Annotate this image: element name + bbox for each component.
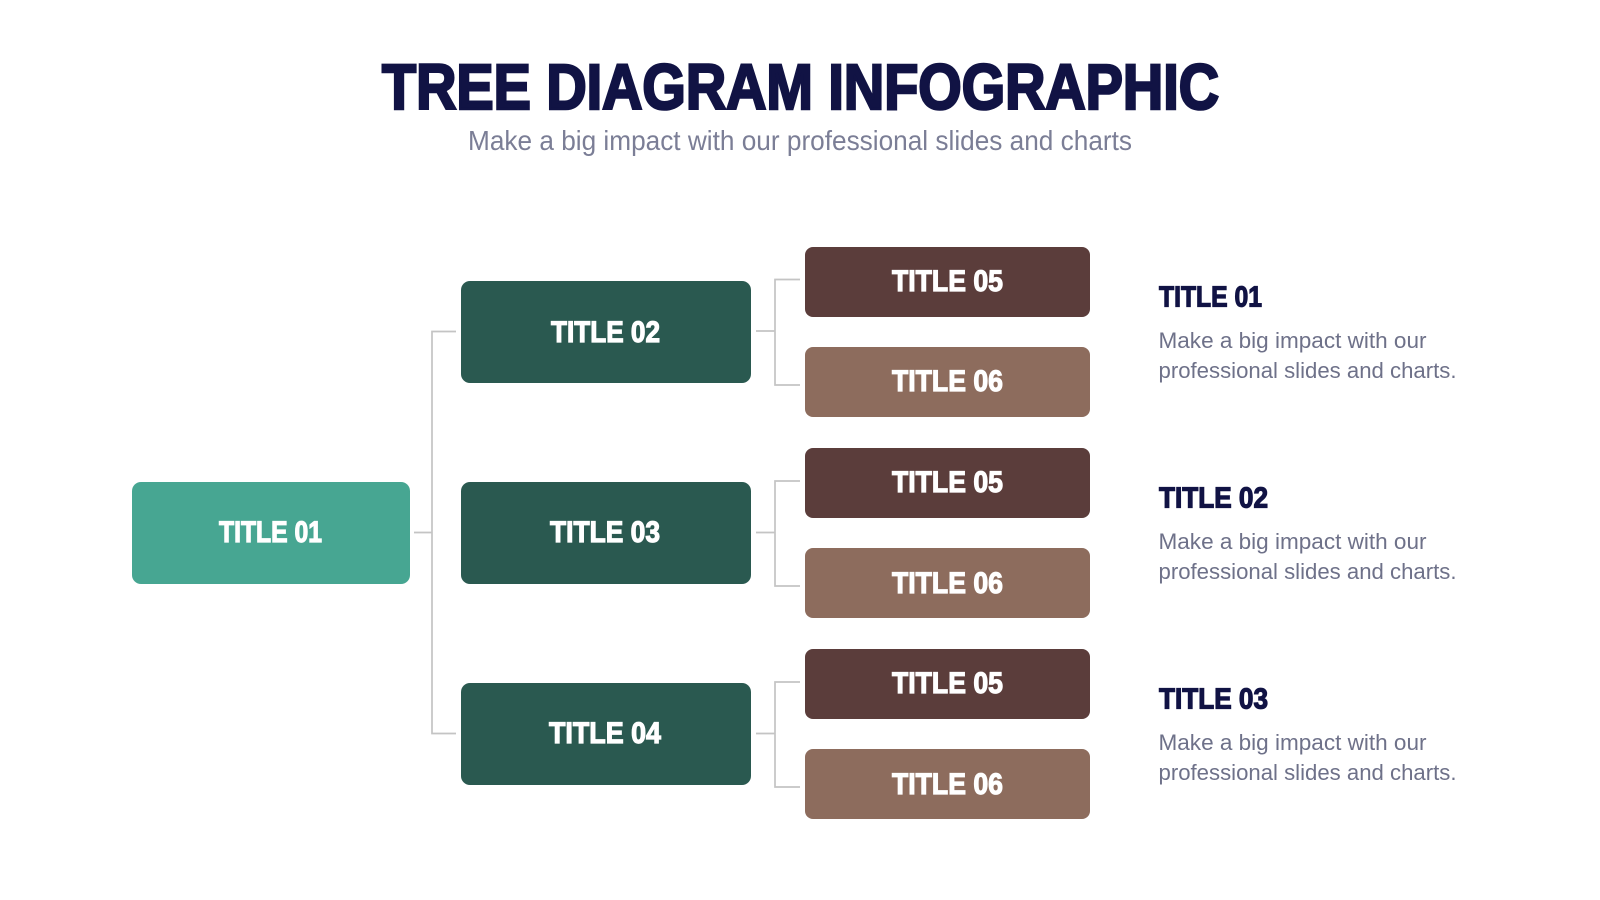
node: branch 1 title 06: TITLE 06	[892, 365, 1003, 398]
subtitle: Make a big impact with our professional slides and charts	[468, 125, 1132, 156]
node: title 02	[461, 281, 751, 383]
node: branch 3 title 06: TITLE 06	[892, 768, 1003, 801]
node: branch 1 title 06	[805, 347, 1090, 417]
title: TREE DIAGRAM INFOGRAPHIC	[382, 51, 1219, 123]
text block: title 01: Make a big impact with our	[1158, 328, 1426, 353]
text block: title 01	[1158, 282, 1456, 383]
text block: title 01: professional slides and charts.	[1158, 358, 1456, 383]
text block: title 03: professional slides and charts.	[1158, 760, 1456, 785]
text block: title 02	[1158, 482, 1456, 584]
node: branch 2 title 06: TITLE 06	[892, 567, 1003, 600]
node: branch 2 title 05: TITLE 05	[892, 466, 1003, 499]
text block: title 03: TITLE 03	[1159, 684, 1268, 716]
text block: title 03	[1158, 684, 1456, 785]
connector: title 02 to children	[756, 280, 800, 385]
node: root title 01: TITLE 01	[219, 516, 322, 549]
connector: title 03 to children	[756, 481, 800, 586]
node: branch 3 title 06	[805, 749, 1090, 819]
node: branch 2 title 06	[805, 548, 1090, 618]
text block: title 02: Make a big impact with our	[1158, 529, 1426, 554]
text block: title 02: professional slides and charts.	[1158, 559, 1456, 584]
text block: title 01: TITLE 01	[1159, 282, 1262, 314]
node: title 03	[461, 482, 751, 584]
node: branch 3 title 05	[805, 649, 1090, 719]
node: title 02: TITLE 02	[551, 316, 660, 349]
node: branch 3 title 05: TITLE 05	[892, 667, 1003, 700]
connector: root to second level	[414, 332, 456, 734]
node: title 04: TITLE 04	[549, 717, 661, 750]
node: root title 01	[132, 482, 410, 584]
connector: title 04 to children	[756, 682, 800, 787]
node: branch 2 title 05	[805, 448, 1090, 518]
node: title 04	[461, 683, 751, 785]
text block: title 02: TITLE 02	[1159, 482, 1268, 514]
node: title 03: TITLE 03	[550, 516, 660, 549]
text block: title 03: Make a big impact with our	[1158, 730, 1426, 755]
node: branch 1 title 05	[805, 247, 1090, 317]
node: branch 1 title 05: TITLE 05	[892, 265, 1003, 298]
